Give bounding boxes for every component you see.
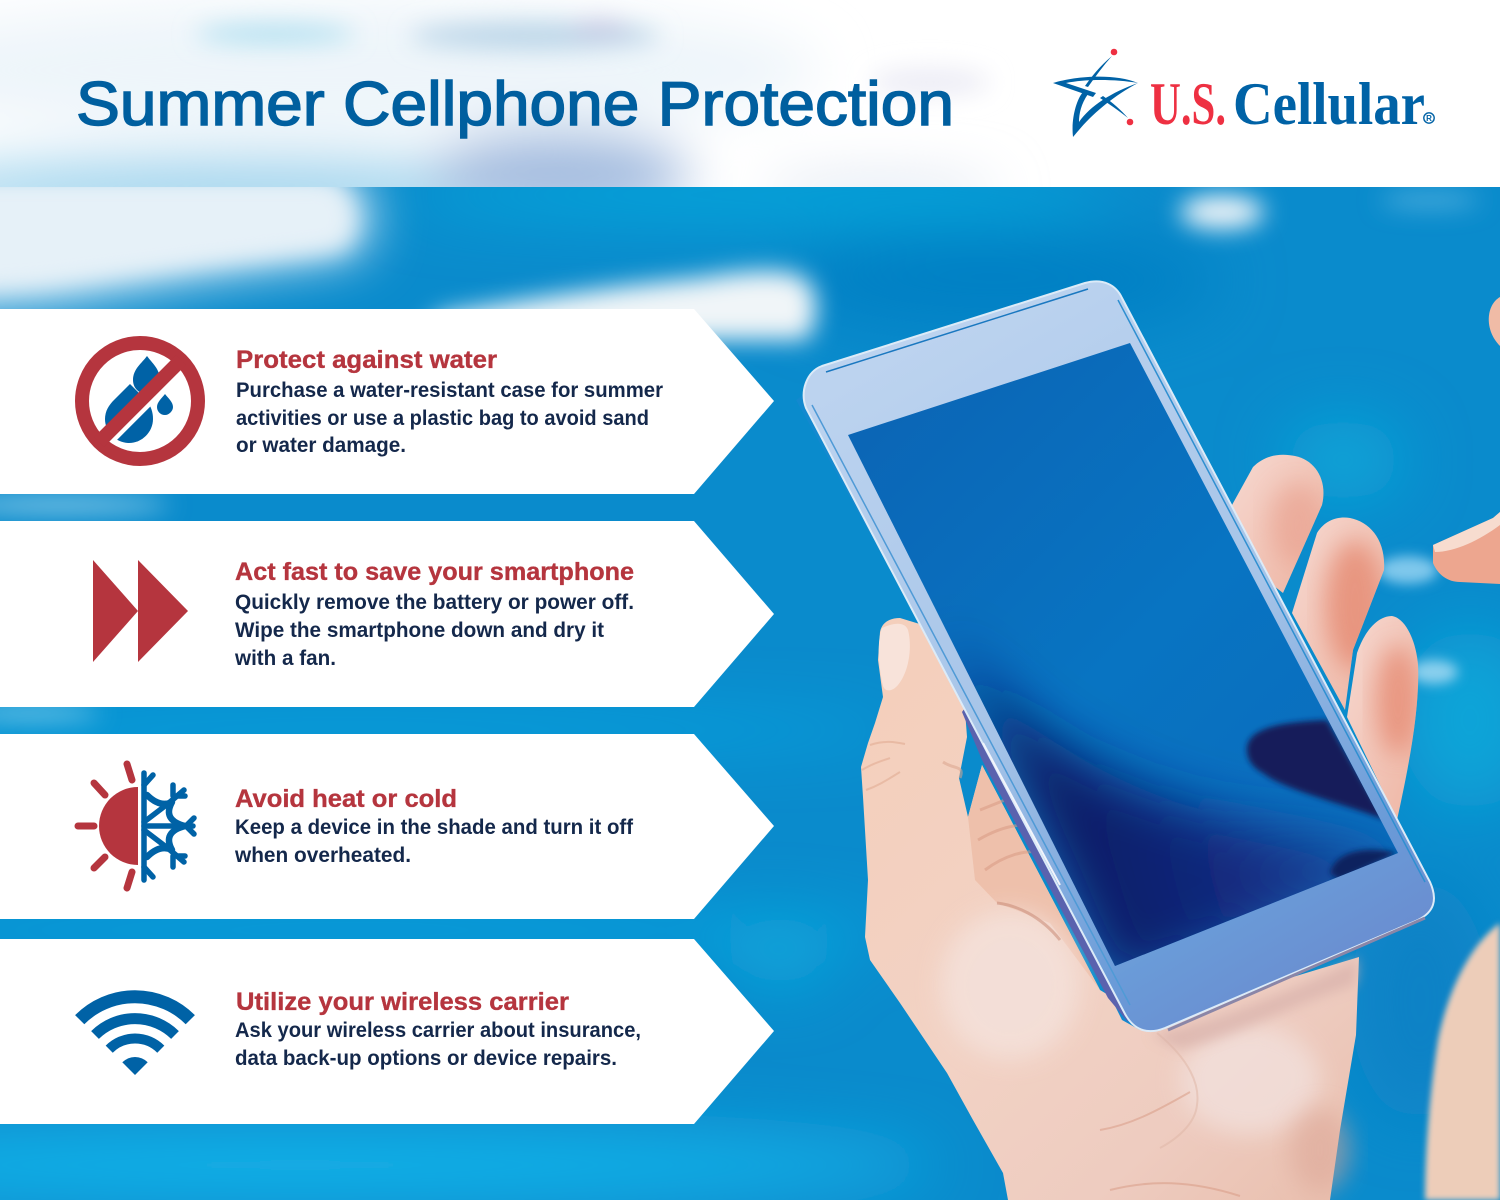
body text: activities or use a plastic bag to avoid sand xyxy=(236,407,649,430)
heading: Protect against water xyxy=(236,346,497,374)
icon: wifi xyxy=(80,997,190,1075)
icon: no water xyxy=(82,343,198,459)
panel: wireless carrier xyxy=(0,939,774,1124)
header band xyxy=(0,0,978,187)
body text: when overheated. xyxy=(234,844,411,867)
heading: Act fast to save your smartphone xyxy=(235,558,634,586)
body text: with a fan. xyxy=(234,647,336,670)
body text xyxy=(236,379,663,457)
phone body xyxy=(804,281,1434,1031)
body text xyxy=(234,816,634,867)
logo: U.S. Cellular xyxy=(1053,49,1434,137)
rear skin between thumb and phone xyxy=(968,765,1100,990)
hand creases and shading xyxy=(862,742,1240,1196)
icon: sun and snowflake xyxy=(78,764,194,888)
phone screen xyxy=(848,343,1410,990)
body text: Keep a device in the shade and turn it off xyxy=(235,816,634,839)
heading: Avoid heat or cold xyxy=(235,785,457,813)
phone xyxy=(796,281,1434,1031)
thumbnail xyxy=(879,624,910,690)
panel: act fast xyxy=(0,521,774,707)
logo wordmark: U.S. xyxy=(1150,71,1226,137)
body text: Quickly remove the battery or power off. xyxy=(235,591,634,614)
body text xyxy=(234,591,634,670)
body text xyxy=(235,1019,641,1070)
phone rim lines xyxy=(812,289,1425,1030)
palm and thumb xyxy=(861,618,1359,1200)
icon: fast forward xyxy=(93,560,188,662)
panel: avoid heat or cold xyxy=(0,734,774,919)
hand highlights xyxy=(940,910,1080,1060)
registered mark: R xyxy=(1426,114,1432,123)
body text: or water damage. xyxy=(236,434,406,457)
phone side edge xyxy=(796,395,1140,1030)
fingers xyxy=(1232,455,1420,820)
hand holding the phone xyxy=(861,297,1500,1200)
body text: Ask your wireless carrier about insurance, xyxy=(235,1019,641,1042)
panel: protect against water xyxy=(0,309,774,494)
body text: data back-up options or device repairs. xyxy=(235,1047,617,1070)
title: Summer Cellphone Protection xyxy=(76,70,954,139)
body text: Purchase a water-resistant case for summer xyxy=(236,379,663,402)
registered mark xyxy=(1424,113,1434,123)
heading: Utilize your wireless carrier xyxy=(236,988,569,1016)
right-edge background hands xyxy=(1425,297,1500,1200)
logo star xyxy=(1053,49,1138,137)
logo: U.S. Cellular: Cellular xyxy=(1233,71,1425,137)
body text: Wipe the smartphone down and dry it xyxy=(235,619,604,642)
